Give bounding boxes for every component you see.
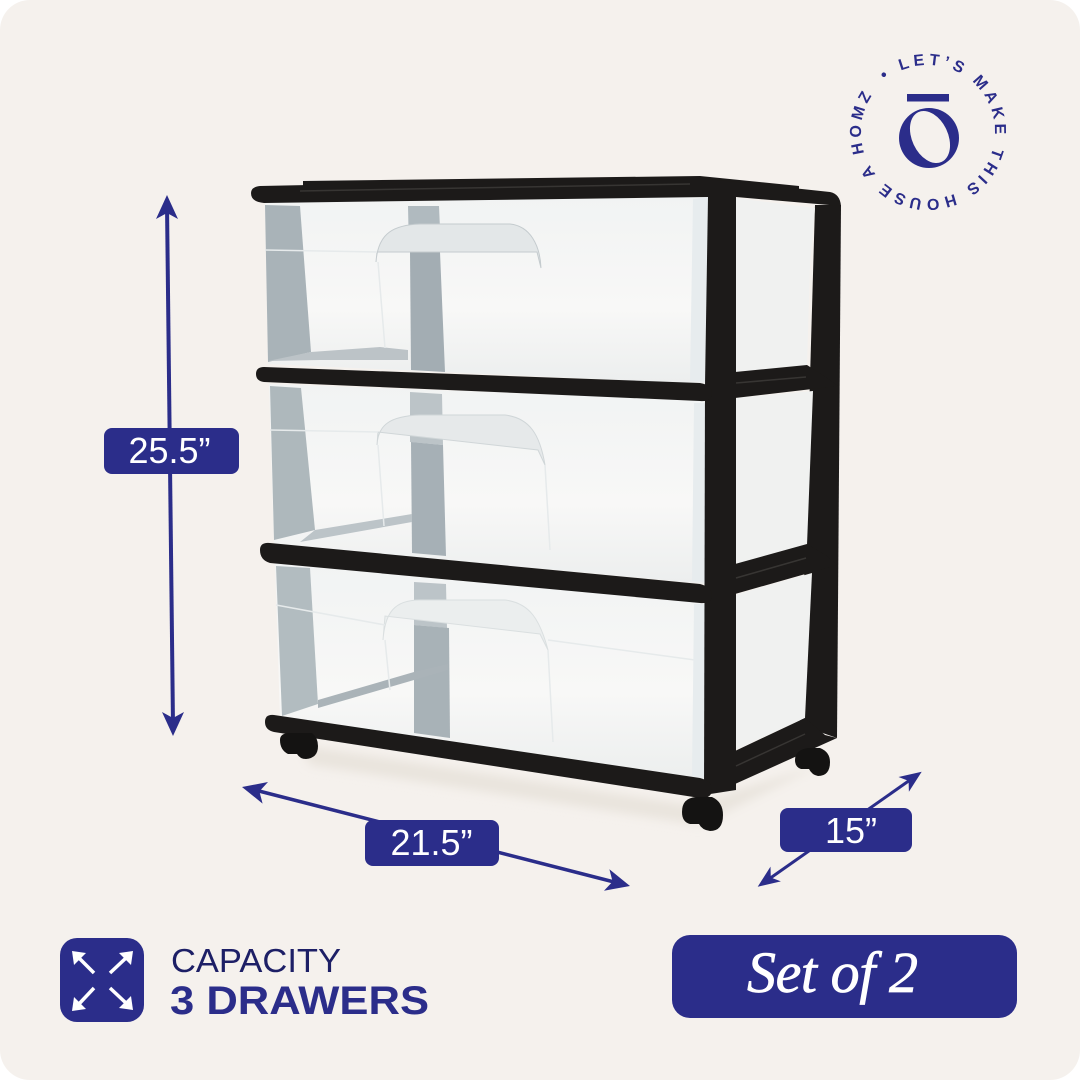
capacity text — [170, 942, 429, 1023]
dimension: depth: 15” — [825, 810, 877, 851]
capacity text: CAPACITY — [171, 942, 341, 979]
drawer 1 — [265, 196, 709, 384]
drawer 3 — [275, 562, 709, 780]
set of 2 badge — [672, 935, 1017, 1018]
side windows — [735, 198, 815, 750]
casters — [280, 733, 830, 831]
dimension: height: 25.5” — [128, 430, 211, 471]
logo badge — [850, 54, 1006, 210]
circular slogan: • LET’S MAKE THIS HOUSE A HOMZ — [850, 54, 1006, 210]
rear post — [800, 205, 841, 738]
frame highlights — [300, 184, 806, 766]
product: three drawer cart — [251, 176, 841, 831]
floor shadow — [300, 745, 820, 825]
drawer 2 — [269, 384, 709, 584]
dimension: depth — [758, 772, 922, 887]
dimension: width — [242, 782, 630, 891]
capacity text: 3 DRAWERS — [170, 979, 429, 1023]
set of 2 badge: Set of 2 — [747, 940, 918, 1005]
logo mark — [899, 94, 959, 170]
icon: expand arrows — [60, 938, 144, 1022]
cart frame — [251, 176, 841, 798]
dimension: height — [104, 195, 239, 736]
dimension: width: 21.5” — [390, 822, 473, 863]
